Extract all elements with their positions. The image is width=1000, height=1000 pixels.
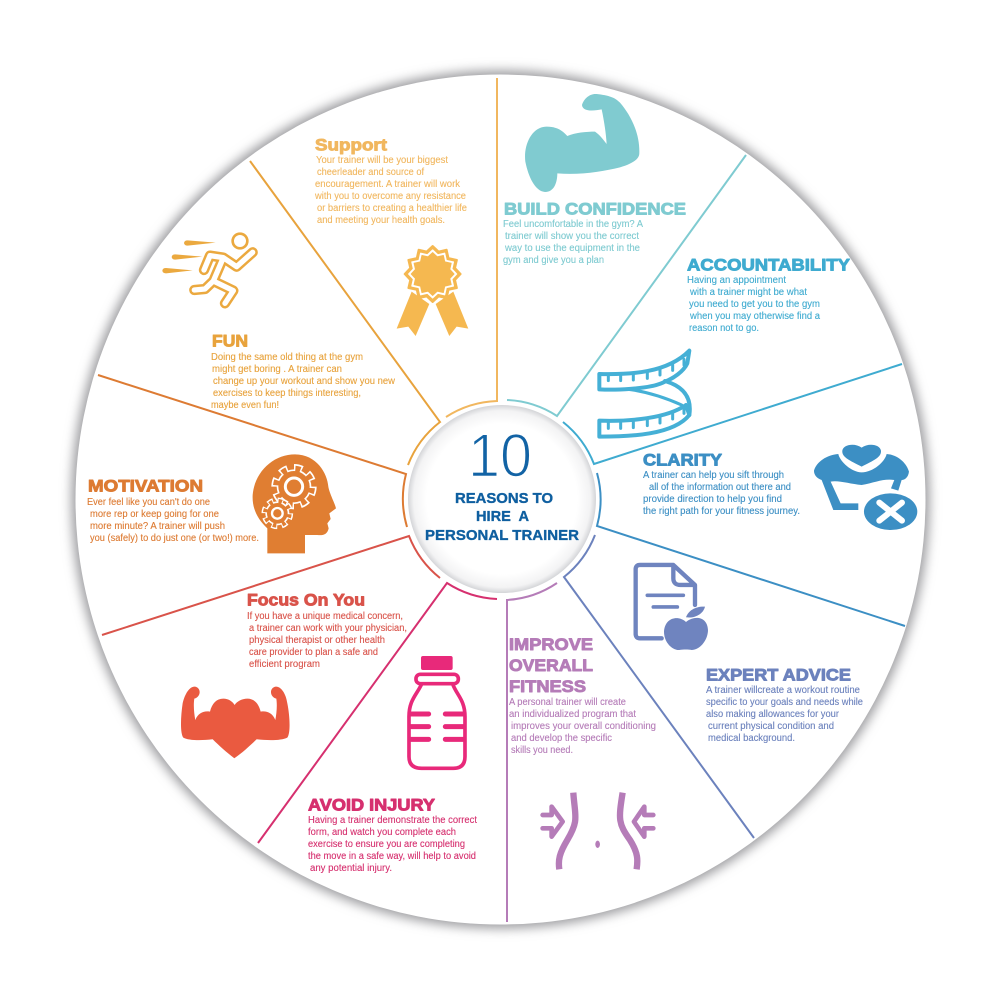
body text: exercises to keep things interesting,: [213, 388, 361, 399]
hub title: [425, 491, 580, 544]
body text: when you may otherwise find a: [689, 311, 821, 322]
body text: Your trainer will be your biggest: [316, 155, 448, 166]
body text: more minute? A trainer will push: [90, 521, 225, 532]
heading: [509, 635, 593, 696]
heading: OVERALL: [509, 656, 593, 675]
body text: efficient program: [249, 659, 320, 670]
panel: build confidence: [503, 94, 686, 266]
wheel background disc: [72, 70, 930, 928]
body text: encouragement. A trainer will work: [315, 179, 460, 190]
icon: document with apple: [636, 565, 708, 650]
icon: head with gears: [253, 454, 336, 553]
body text: Doing the same old thing at the gym: [211, 352, 363, 363]
body text: [503, 219, 643, 266]
body text: all of the information out there and: [649, 482, 791, 493]
body text: might get boring . A trainer can: [212, 364, 342, 375]
heading: CLARITY: [643, 450, 722, 470]
panel: improve overall fitness: [509, 635, 656, 869]
heading: MOTIVATION: [88, 476, 203, 496]
hub title: PERSONAL TRAINER: [425, 528, 580, 544]
body text: way to use the equipment in the: [504, 243, 641, 254]
heading: BUILD CONFIDENCE: [504, 200, 686, 218]
panel: fun: [162, 234, 396, 411]
icon: flexed arm: [525, 94, 639, 192]
body text: exercise to ensure you are completing: [308, 839, 465, 850]
body text: more rep or keep going for one: [90, 509, 220, 520]
panel: motivation: [87, 454, 336, 553]
panel: focus on you: [181, 590, 407, 758]
hub title: REASONS TO: [455, 491, 553, 507]
heading: EXPERT ADVICE: [706, 666, 851, 684]
heading: FUN: [212, 332, 248, 350]
body text: an individualized program that: [509, 709, 636, 720]
panel: avoid injury: [308, 656, 477, 874]
icon: running figure: [162, 234, 253, 303]
body text: A trainer willcreate a workout routine: [706, 685, 861, 696]
body text: change up your workout and show you new: [213, 376, 396, 387]
panel: clarity: [643, 445, 917, 530]
panel: accountability: [599, 256, 850, 437]
icon: muscles with heart and x badge: [814, 445, 917, 530]
body text: cheerleader and source of: [317, 167, 424, 178]
body text: trainer will show you the correct: [505, 231, 639, 242]
icon: heart with flexed arms: [181, 687, 290, 758]
icon: waist with arrows: [543, 793, 653, 869]
body text: [706, 685, 864, 744]
heading: ACCOUNTABILITY: [687, 256, 850, 274]
body text: physical therapist or other health: [249, 635, 385, 646]
heading: IMPROVE: [509, 635, 593, 654]
body text: provide direction to help you find: [643, 494, 782, 505]
body text: [308, 815, 477, 874]
body text: current physical condition and: [708, 721, 834, 732]
body text: A personal trainer will create: [509, 697, 627, 708]
body text: [643, 470, 800, 517]
body text: the move in a safe way, will help to avoid: [308, 851, 476, 862]
body text: [87, 497, 259, 544]
body text: you (safely) to do just one (or two!) more.: [90, 533, 259, 544]
heading: Support: [315, 136, 388, 154]
body text: you need to get you to the gym: [689, 299, 820, 310]
panel: expert advice: [636, 565, 864, 744]
body text: and meeting your health goals.: [317, 215, 445, 226]
body text: form, and watch you complete each: [308, 827, 456, 838]
icon: award ribbon: [397, 246, 468, 336]
body text: medical background.: [708, 733, 795, 744]
body text: skills you need.: [511, 745, 573, 756]
body text: Feel uncomfortable in the gym? A: [503, 219, 643, 230]
body text: reason not to go.: [689, 323, 759, 334]
body text: Ever feel like you can't do one: [87, 497, 211, 508]
body text: with a trainer might be what: [689, 287, 807, 298]
body text: [687, 275, 821, 334]
heading: Focus On You: [247, 590, 365, 610]
body text: Having an appointment: [687, 275, 786, 286]
body text: [247, 611, 407, 670]
body text: specific to your goals and needs while: [706, 697, 864, 708]
body text: [509, 697, 656, 756]
body text: with you to overcome any resistance: [314, 191, 467, 202]
center hub: [408, 405, 596, 593]
body text: gym and give you a plan: [503, 255, 604, 266]
heading: AVOID INJURY: [308, 796, 435, 814]
body text: or barriers to creating a healthier life: [317, 203, 468, 214]
body text: [211, 352, 396, 411]
body text: A trainer can help you sift through: [643, 470, 784, 481]
icon: measuring tape: [599, 351, 690, 437]
body text: any potential injury.: [310, 863, 392, 874]
panel: support: [314, 136, 468, 336]
icon: water bottle: [409, 656, 465, 768]
body text: the right path for your fitness journey.: [643, 506, 800, 517]
body text: [314, 155, 468, 226]
body text: and develop the specific: [511, 733, 612, 744]
body text: If you have a unique medical concern,: [247, 611, 403, 622]
body text: maybe even fun!: [211, 400, 279, 411]
body text: also making allowances for your: [706, 709, 840, 720]
body text: care provider to plan a safe and: [249, 647, 378, 658]
body text: Having a trainer demonstrate the correct: [308, 815, 477, 826]
body text: improves your overall conditioning: [511, 721, 656, 732]
heading: FITNESS: [509, 677, 586, 696]
hub title: HIRE A: [476, 509, 530, 525]
body text: a trainer can work with your physician,: [249, 623, 407, 634]
number 10: 10: [468, 422, 532, 490]
